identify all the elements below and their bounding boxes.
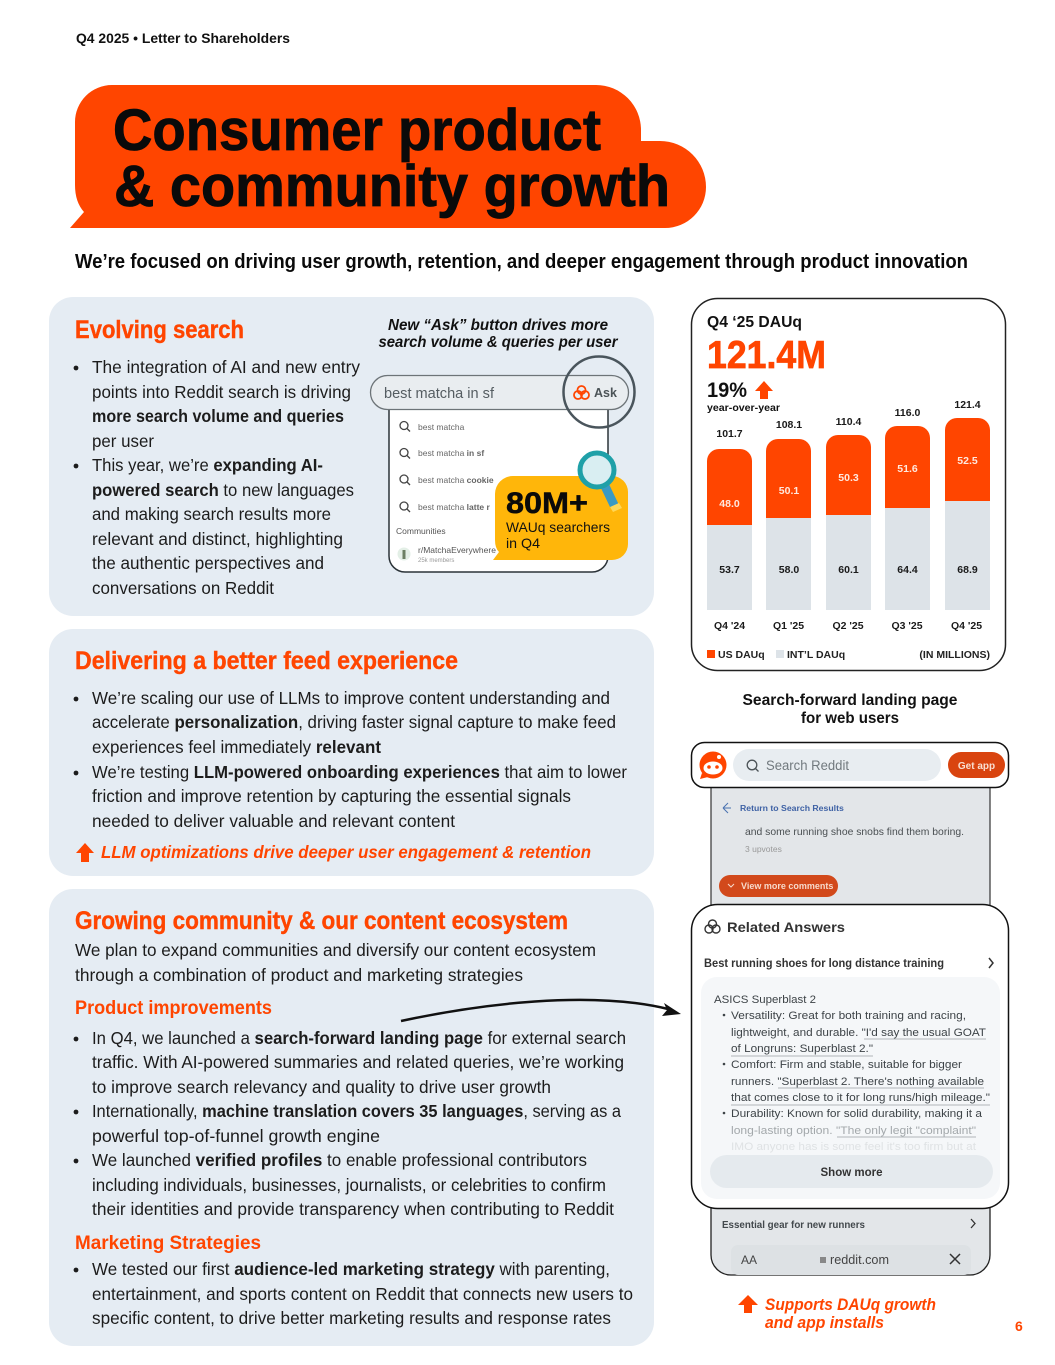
- related answers card: Comfort: Firm and stable, suitable for bigger: [731, 1059, 962, 1071]
- bullet list: product: to improve search relevancy and quality to drive user growth: [92, 1077, 551, 1097]
- bullet list: marketing: entertainment, and sports content on Reddit that connects new users to: [92, 1284, 633, 1304]
- bullet list: feed: needed to deliver valuable and relevant content: [92, 811, 455, 831]
- search dropdown mockup: Ask: [594, 386, 617, 400]
- stacked bar chart: 53.7: [719, 564, 740, 576]
- bullet list: search: [74, 357, 360, 598]
- bullet list: marketing: We tested our first audience-led marketing strategy with parenting,: [92, 1259, 610, 1279]
- stacked bar chart: Q1 '25: [773, 620, 804, 632]
- callout: 80M+ searchers: 80M+: [506, 487, 588, 520]
- bullet list: feed: [74, 688, 627, 831]
- subtitle: We’re focused on driving user growth, retention, and deeper engagement through product innovation: [75, 251, 968, 273]
- search dropdown mockup: [370, 356, 634, 572]
- stacked bar chart: 121.4: [954, 399, 981, 411]
- bullet list: search: powered search to new languages: [92, 480, 354, 500]
- chart legend: [707, 649, 990, 661]
- icon: answers: [705, 920, 720, 933]
- related answers card: Best running shoes for long distance training: [704, 958, 944, 970]
- growth stat: year-over-year: [707, 402, 780, 414]
- related answers card: runners. "Superblast 2. There's nothing available: [731, 1076, 984, 1088]
- search dropdown mockup: best matcha: [418, 422, 465, 432]
- caption: landing page: for web users: [801, 710, 899, 727]
- growth stat: 19%: [707, 379, 747, 402]
- growth stat: [707, 379, 780, 414]
- caption: landing page: [742, 692, 958, 727]
- search dropdown mockup: Communities: [396, 526, 446, 536]
- screen background upper: View more comments: [741, 881, 833, 891]
- search bar card: [692, 742, 1008, 788]
- panel: feed experience: [49, 629, 654, 876]
- stacked bar chart: Q3 '25: [891, 620, 923, 632]
- page number: 6: [1015, 1318, 1023, 1334]
- stacked bar chart: 116.0: [895, 407, 921, 419]
- bullet list: feed: experiences feel immediately relevant: [92, 737, 381, 757]
- callout: DAUq growth: [738, 1295, 936, 1332]
- title: Consumer product: [113, 98, 601, 163]
- chart legend: (IN MILLIONS): [919, 649, 990, 661]
- bullet list: product: In Q4, we launched a search-forward landing page for external search: [92, 1028, 626, 1048]
- stacked bar chart: Q4 '25: [951, 620, 982, 632]
- bullet list: product: We launched verified profiles to enable professional contributors: [92, 1150, 587, 1170]
- bullet list: feed: accelerate personalization, driving faster signal capture to make feed: [92, 712, 616, 732]
- chart legend: US DAUq: [718, 649, 765, 661]
- bullet list: marketing: [74, 1259, 633, 1328]
- stacked bar chart: Q4 '24: [714, 620, 745, 632]
- bullet list: search: This year, we’re expanding AI-: [92, 455, 323, 475]
- stacked bar chart: 48.0: [719, 498, 740, 510]
- screen background upper: [711, 780, 990, 910]
- stacked bar chart: Q2 '25: [832, 620, 864, 632]
- stacked bar chart: 108.1: [776, 419, 802, 431]
- caption: landing page: Search-forward landing page: [742, 692, 958, 709]
- title: [70, 85, 706, 228]
- screen background lower: [711, 1200, 990, 1275]
- search dropdown mockup: best matcha cookie: [418, 475, 494, 485]
- stacked bar chart: 68.9: [957, 564, 978, 576]
- title: & community growth: [114, 154, 670, 219]
- arrow: to landing page: [401, 1000, 681, 1021]
- caption: ask button: search volume & queries per user: [378, 334, 618, 351]
- caption: ask button: New “Ask” button drives more: [388, 317, 608, 334]
- bullet list: search: The integration of AI and new entry: [92, 357, 360, 377]
- icon: magnifier: [580, 453, 622, 512]
- caption: ask button: [378, 317, 618, 351]
- related answers card: Related Answers: [727, 919, 845, 935]
- bullet list: product: powerful top-of-funnel growth engine: [92, 1126, 380, 1146]
- bullet list: feed: friction and improve retention by capturing the essential signals: [92, 786, 571, 806]
- search dropdown mockup: best matcha latte r: [418, 502, 491, 512]
- related answers card: Versatility: Great for both training and racing,: [731, 1010, 966, 1022]
- heading: feed experience: Delivering a better feed experience: [75, 647, 458, 675]
- related answers card: IMO anyone has is some feel it's too firm but at: [731, 1141, 976, 1153]
- related answers card: lightweight, and durable. "I'd say the usual GOAT: [731, 1027, 986, 1039]
- screen background upper: Return to Search Results: [740, 803, 844, 813]
- callout: DAUq growth: Supports DAUq growth: [765, 1296, 936, 1314]
- stacked bar chart: 58.0: [779, 564, 799, 576]
- bullet list: marketing: specific content, to drive better marketing results and response rates: [92, 1308, 611, 1328]
- stacked bar chart: 50.1: [779, 485, 799, 497]
- intro text: We plan to expand communities and diversify our content ecosystem: [75, 940, 596, 960]
- bullet list: product: including individuals, businesses, journalists, or celebrities to confirm: [92, 1175, 606, 1195]
- DAUq value: 121.4M: [707, 334, 826, 377]
- callout: 80M+ searchers: WAUq searchers: [506, 519, 610, 535]
- header label: Q4 2025 • Letter to Shareholders: [76, 30, 290, 46]
- stacked bar chart: [707, 399, 990, 632]
- bullet list: feed: We’re testing LLM-powered onboarding experiences that aim to lower: [92, 762, 627, 782]
- callout: LLM optimizations: LLM optimizations drive deeper user engagement & retention: [101, 842, 591, 862]
- intro text: through a combination of product and marketing strategies: [75, 965, 523, 985]
- bullet list: search: conversations on Reddit: [92, 578, 274, 598]
- phone mockup: landing page: [692, 742, 1008, 1275]
- bullet list: feed: We’re scaling our use of LLMs to improve content understanding and: [92, 688, 610, 708]
- stacked bar chart: 64.4: [897, 564, 918, 576]
- search dropdown mockup: r/MatchaEverywhere: [418, 545, 496, 555]
- related answers card: Show more: [821, 1167, 882, 1179]
- related answers card: [692, 904, 1008, 1208]
- heading: evolving search: Evolving search: [75, 316, 244, 344]
- subheading: marketing strategies: Marketing Strategies: [75, 1233, 261, 1254]
- DAUq heading: Q4 ‘25 DAUq: [707, 314, 802, 331]
- stacked bar chart: 60.1: [838, 564, 859, 576]
- bullet list: search: relevant and distinct, highlighting: [92, 529, 343, 549]
- search dropdown mockup: 25k members: [418, 558, 454, 564]
- panel: evolving search: [49, 297, 654, 616]
- bullet list: search: per user: [92, 431, 154, 451]
- stacked bar chart: 110.4: [836, 416, 862, 428]
- heading: community: Growing community & our content ecosystem: [75, 907, 568, 935]
- screen background lower: Essential gear for new runners: [722, 1220, 865, 1231]
- panel: community and content: [49, 889, 654, 1346]
- search dropdown mockup: best matcha in sf: [384, 385, 495, 402]
- screen background lower: reddit.com: [830, 1252, 889, 1267]
- chart legend: INT’L DAUq: [787, 649, 845, 661]
- search bar card: Search Reddit: [766, 758, 849, 773]
- related answers card: Durability: Known for solid durability, making it a: [731, 1108, 983, 1120]
- bullet list: search: the authentic perspectives and: [92, 553, 324, 573]
- bullet list: product: traffic. With AI-powered summaries and related queries, we’re working: [92, 1052, 624, 1072]
- related answers card: of Longruns: Superblast 2.": [731, 1043, 873, 1055]
- bullet list: search: and making search results more: [92, 504, 331, 524]
- panel: DAUq chart: [692, 298, 1006, 670]
- screen background upper: 3 upvotes: [745, 844, 782, 854]
- subheading: product improvements: Product improvements: [75, 998, 272, 1019]
- screen background upper: and some running shoe snobs find them boring.: [745, 827, 964, 838]
- bullet list: search: points into Reddit search is driving: [92, 382, 351, 402]
- stacked bar chart: 51.6: [897, 463, 918, 475]
- callout: 80M+ searchers: in Q4: [506, 535, 540, 551]
- stacked bar chart: 52.5: [957, 455, 978, 467]
- search bar card: Get app: [958, 761, 995, 772]
- related answers card: ASICS Superblast 2: [714, 994, 816, 1006]
- related answers card: long-lasting option. "The only legit "complaint": [731, 1125, 976, 1137]
- bullet list: search: more search volume and queries: [92, 406, 344, 426]
- search dropdown mockup: best matcha in sf: [418, 448, 484, 458]
- bullet list: product: their identities and provide transparency when contributing to Reddit: [92, 1199, 614, 1219]
- screen background lower: AA: [741, 1253, 757, 1267]
- callout: 80M+ searchers: [493, 453, 628, 560]
- bullet list: product: Internationally, machine translation covers 35 languages, serving as a: [92, 1101, 621, 1121]
- icon: reddit mascot: [700, 752, 726, 779]
- stacked bar chart: 101.7: [716, 428, 743, 440]
- bullet list: product: [74, 1028, 626, 1219]
- callout: DAUq growth: and app installs: [765, 1314, 884, 1332]
- stacked bar chart: 50.3: [838, 472, 859, 484]
- related answers card: that comes close to it for long runs/high mileage.": [731, 1092, 990, 1104]
- intro text: [75, 940, 596, 985]
